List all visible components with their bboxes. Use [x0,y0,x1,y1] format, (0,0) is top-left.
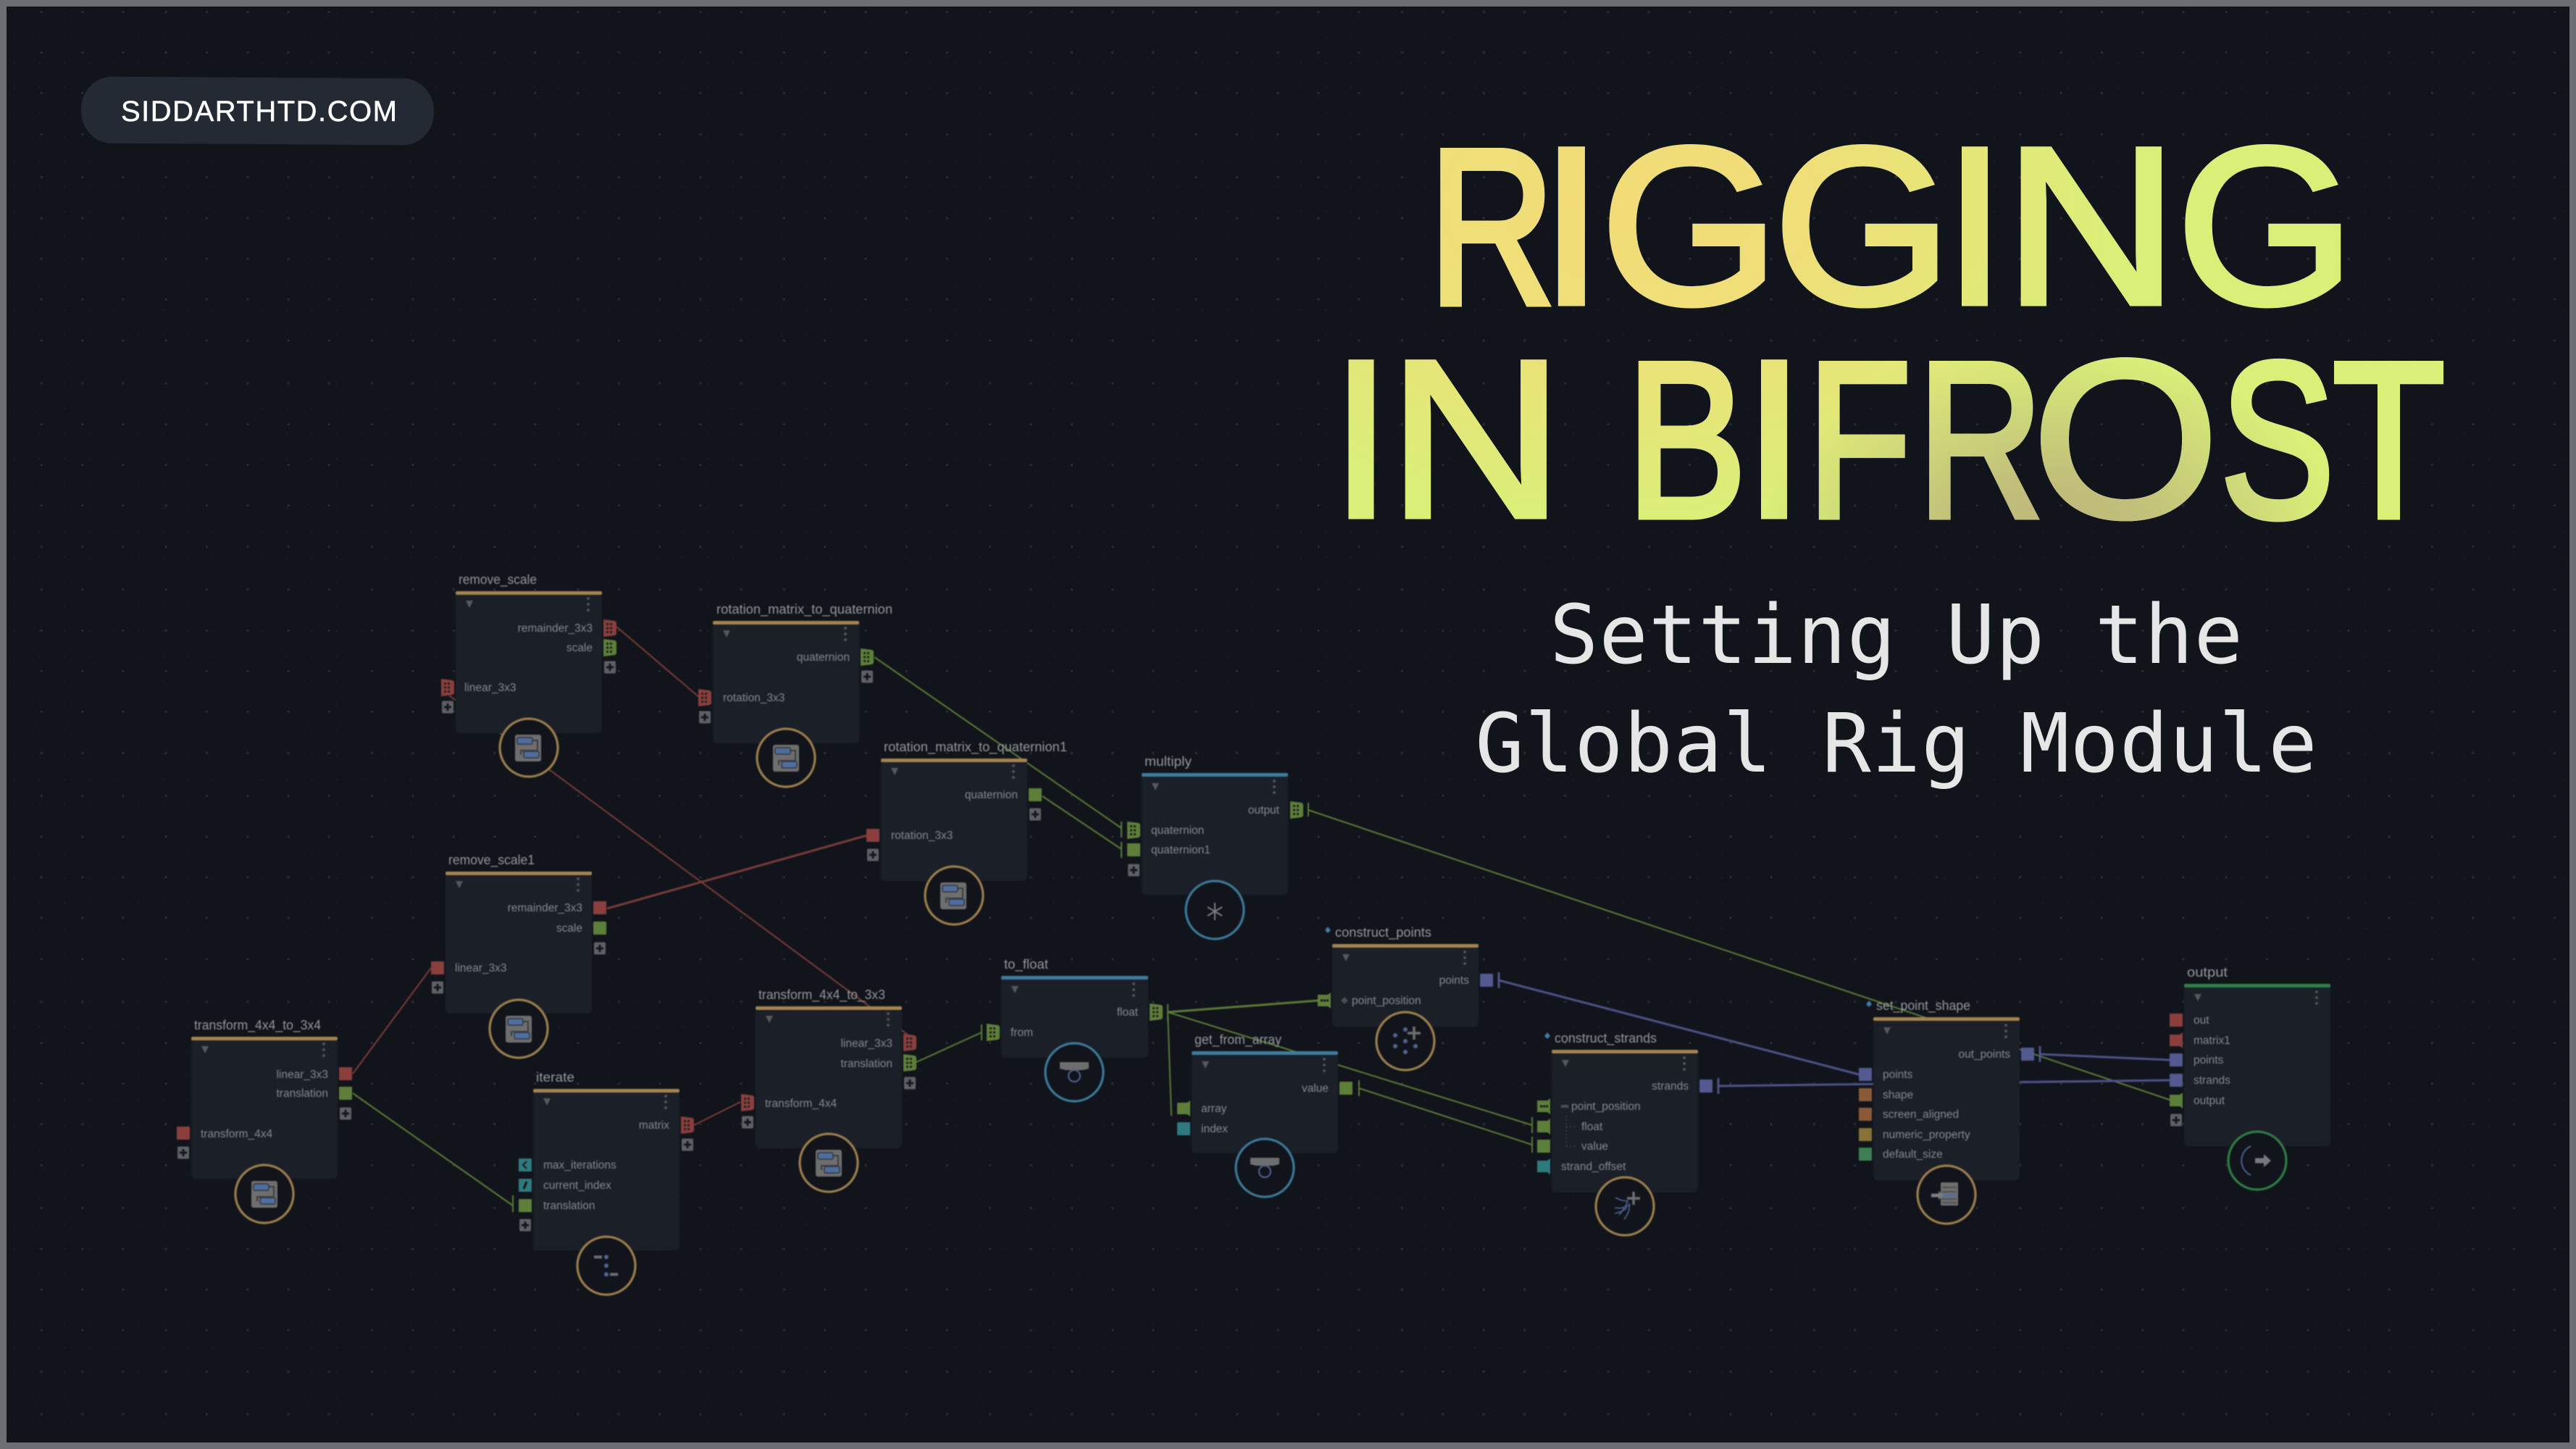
ports: scale [556,922,582,935]
title colour gradient [1326,138,2456,529]
node: output [2170,965,2330,1190]
ports: array [1201,1103,1227,1115]
title: multiply [1145,754,1192,769]
ports: screen_aligned [1883,1108,1959,1121]
ports: point_position [1571,1101,1641,1113]
title: R [1918,316,2043,564]
title: G [1600,100,1779,351]
ports [1127,801,1303,877]
ports: out [2194,1014,2209,1027]
ports: quaternion [965,789,1018,801]
ports: linear_3x3 [276,1069,328,1081]
node: to_float [987,957,1163,1101]
ports [177,1067,352,1159]
ports: translation [276,1087,328,1100]
ports: transform_4x4 [765,1098,837,1110]
ports: output [1248,804,1280,817]
title: set_point_shape [1876,998,1970,1014]
title: F [1807,316,1911,564]
node: remove_scale [441,572,616,777]
ports: from [1011,1027,1033,1039]
ports: float [1117,1006,1139,1019]
icon [1918,1166,1975,1224]
ports: rotation_3x3 [723,692,785,704]
ports: rotation_3x3 [891,830,953,842]
title: transform_4x4_to_3x3 [758,987,885,1003]
ports [519,1116,694,1232]
ports: quaternion [797,651,850,664]
node: construct_strands [1537,1031,1713,1235]
ports [431,901,606,994]
title: remove_scale [459,572,537,588]
icon [800,1134,858,1192]
icon [1596,1177,1654,1235]
title: N [2004,100,2179,351]
title: output [2187,965,2228,980]
title: G [2176,100,2355,351]
title: I [1743,313,1805,564]
title: rotation_matrix_to_quaternion1 [884,740,1067,755]
ports: translation [543,1200,595,1212]
ports [698,648,874,723]
subtitle [1475,588,2318,791]
ports: translation [840,1058,892,1070]
ports: matrix [639,1119,669,1132]
ports: matrix1 [2194,1035,2230,1047]
ports: value [1302,1082,1329,1095]
ports: index [1201,1123,1228,1135]
ports [987,1003,1163,1041]
ports: linear_3x3 [464,682,517,694]
ports [1537,1080,1713,1174]
node: set_point_shape [1859,998,2034,1224]
website badge: SIDDARTHTD.COM [121,96,397,128]
ports: scale [566,642,593,654]
ports: max_iterations [543,1159,616,1172]
ports: out_points [1958,1048,2010,1061]
ports [1859,1048,2034,1161]
icon [1236,1139,1294,1197]
ports: transform_4x4 [201,1128,272,1140]
node: get_from_array [1177,1032,1352,1197]
ports: quaternion1 [1151,844,1210,856]
title: construct_strands [1555,1031,1657,1046]
icon [490,1000,548,1058]
title: B [1626,316,1747,564]
node: transform_4x4_to_3x4 [177,1018,352,1223]
ports [1318,974,1493,1009]
ports: points [1883,1069,1913,1081]
title: G [1773,100,1952,351]
title: iterate [536,1070,574,1085]
node: transform_4x4_to_3x3 [741,987,916,1192]
node: construct_points [1318,925,1493,1070]
subtitle: Global Rig Module [1475,697,2318,791]
icon [1186,881,1244,939]
title: to_float [1004,957,1048,972]
title [1330,100,2445,564]
icon [925,867,983,924]
title: I [1330,313,1391,564]
ports: strands [1652,1080,1689,1093]
ports: linear_3x3 [840,1037,892,1050]
node: rotation_matrix_to_quaternion [698,602,892,787]
ports: quaternion [1151,824,1204,837]
icon [2228,1132,2286,1190]
icon [500,719,558,777]
title: R [1429,103,1555,351]
icon [1376,1012,1434,1070]
title: I [1944,100,2006,351]
ports: strands [2194,1074,2230,1087]
node: iterate [519,1070,694,1295]
node: rotation_matrix_to_quaternion1 [866,740,1067,924]
title: O [2032,313,2219,564]
website badge [81,77,434,145]
subtitle: Setting Up the [1550,588,2243,682]
title: rotation_matrix_to_quaternion [716,602,892,617]
ports: points [1439,974,1469,987]
ports: points [2194,1054,2224,1066]
ports: default_size [1883,1148,1943,1161]
icon [1045,1043,1103,1101]
node graph [177,572,2330,1295]
title: S [2220,316,2335,564]
ports: point_position [1352,995,1421,1007]
ports [866,788,1042,861]
title line 1 [1429,100,2355,351]
title: I [1539,100,1604,351]
ports: value [1581,1140,1608,1153]
icon [757,729,815,787]
ports [741,1034,916,1129]
ports: remainder_3x3 [518,622,593,635]
node: multiply [1127,754,1303,939]
ports [2170,1014,2230,1126]
ports: numeric_property [1883,1129,1970,1141]
title: get_from_array [1195,1032,1281,1048]
ports [441,619,616,713]
title line 2 [1330,313,2445,564]
ports: shape [1883,1089,1913,1101]
title: construct_points [1335,925,1431,940]
ports: output [2194,1095,2225,1107]
title: T [2333,316,2445,564]
ports: remainder_3x3 [508,902,582,914]
node: remove_scale1 [431,853,606,1058]
title: N [1388,313,1564,564]
title: remove_scale1 [448,853,535,868]
ports: float [1581,1121,1603,1133]
ports [1177,1082,1352,1135]
title: transform_4x4_to_3x4 [194,1018,321,1033]
icon [577,1237,635,1295]
ports: current_index [543,1179,611,1192]
ports: strand_offset [1561,1161,1626,1173]
icon [235,1165,293,1223]
connection wires [353,627,2170,1212]
ports: linear_3x3 [455,962,507,974]
